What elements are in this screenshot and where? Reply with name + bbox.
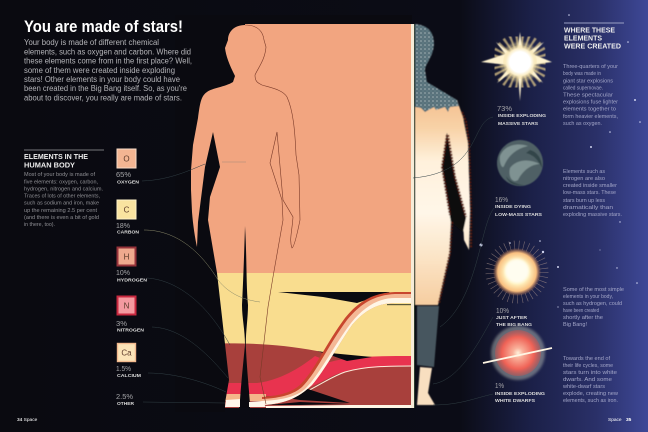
white streak [483,348,552,363]
label: 73%: INSIDE EXPLODING [498,113,546,119]
text: white dwarfs: Towards the end of [563,356,611,362]
band: lower black slivers [268,387,350,405]
element: other: OTHER [117,401,135,407]
band: carbon [190,273,412,408]
element: other: 2.5% [116,392,133,401]
text: elements description: in there, too). [24,222,55,228]
heading: where these elements were created: WERE CREATED [564,44,621,50]
mask: dark space around left silhouette [175,15,412,412]
label: 73% [497,104,546,127]
element: other [116,392,135,407]
intro text: stars! Other elements in your body could have [24,75,181,84]
text: massive stars: such as oxygen. [563,121,602,127]
band: oxygen [190,24,412,273]
element: nitrogen [116,296,145,334]
intro text: Your body is made of different chemical [24,38,159,47]
element: calcium [116,344,141,379]
text: low-mass stars: created inside smaller [563,183,617,189]
heading: elements: ELEMENTS IN THE [24,154,88,161]
element: calcium: CALCIUM [117,373,141,379]
label: 1%: INSIDE EXPLODING [495,391,545,397]
foot [417,367,435,405]
mask: gap between legs [239,226,250,408]
element: calcium: 1.5% [116,364,131,373]
text: low-mass stars: Elements such as [563,169,605,175]
text: elements description: hydrogen, nitrogen and calcium. [24,187,103,193]
planet bands [500,144,540,181]
text: big bang: Some of the most simple [563,287,624,293]
label: 73%: 73% [497,104,512,113]
text: massive stars: body was made in [563,71,601,77]
text: white dwarfs [562,356,618,404]
sankey panel: left half of body, elements by colour [190,24,412,408]
intro text: these elements come from in the first place? Well, [24,57,192,66]
text: massive stars: called supernovae. [563,86,603,92]
page number right: Space 35 [608,417,632,423]
head and shoulders dotted [415,24,459,112]
heading: where these elements were created [564,22,624,50]
star: just after the big bang [490,245,544,299]
element: hydrogen: HYDROGEN [117,278,148,284]
label: 10% [496,306,532,328]
text: low-mass stars: dramatically than [563,205,613,211]
arm gap [442,133,466,232]
page number left: 34 Space [17,417,38,423]
element: oxygen: O [123,154,130,164]
element: carbon: CARBON [117,230,140,236]
text: white dwarfs: dwarfs. And some [563,377,612,383]
text: white dwarfs: their life cycles, some [563,363,613,369]
body fill [415,100,470,305]
text: low-mass stars: stars burn up less [563,198,605,204]
text: white dwarfs: stars turn into white [563,370,617,376]
band: bundle S curve [262,292,412,405]
planet: inside dying low-mass stars [497,140,543,186]
heading: elements: HUMAN BODY [24,162,75,170]
text: white dwarfs: elements, such as iron. [563,398,618,404]
band: right thin dark line [387,304,412,305]
vertical divider strip [411,24,415,408]
text: massive stars: explosions fuse lighter [563,100,618,106]
band: base white line [266,405,412,408]
text: low-mass stars: low-mass stars. These [563,190,616,196]
element: nitrogen: N [124,302,130,310]
text: white dwarfs: explode, creating new [563,391,618,397]
intro text: some of them were created inside exploding [24,66,175,75]
text: elements description [24,172,103,228]
intro text: about to discover, you really are made of stars. [24,93,182,102]
text: big bang: have been created [563,308,599,314]
right half of body: made of stars [415,24,471,405]
text: big bang [563,287,624,328]
element: carbon [116,200,140,236]
text: massive stars: form heavier elements, [563,114,619,120]
element: calcium: Ca [121,348,132,358]
leader lines: left labels to body [142,162,260,403]
text: big bang: shortly after the [563,315,603,321]
text: big bang: such as hydrogen, could [563,301,622,307]
title: You are made of stars! [24,18,183,36]
text: massive stars: Three-quarters of your [563,64,618,70]
element: hydrogen [116,248,148,284]
body speckled edge [439,112,471,303]
text: elements description: up the remaining 2.5 per cent [24,208,98,214]
element: nitrogen: NITROGEN [117,328,145,334]
intro text: been created in the Big Bang itself. So, as you're [24,84,188,93]
feet [225,399,266,407]
band: upper black sliver [278,292,390,303]
band: nitrogen pink [190,356,412,396]
text: massive stars: elements together to [563,107,616,113]
label: 73%: MASSIVE STARS [498,121,539,127]
label: 1%: 1% [495,381,504,390]
star spikes [481,32,552,101]
heading: where these elements were created: ELEMENTS [564,36,602,42]
element: oxygen: 65% [116,170,131,179]
band: calcium peach base [190,394,266,401]
label: 16%: 16% [495,195,508,204]
outline: right side of left figure [245,25,300,404]
shin grey [417,306,439,367]
element: carbon: 18% [116,221,130,230]
intro text: elements, such as oxygen and carbon. Where did [24,47,191,56]
label: 10%: JUST AFTER [496,315,528,321]
element: carbon: C [124,206,130,214]
element: nitrogen: 3% [116,319,127,328]
text: elements description: such as sodium and iron, make [24,201,99,207]
text: massive stars [563,64,619,127]
text: big bang: Big Bang! [563,322,588,328]
label: 16%: INSIDE DYING [495,204,531,210]
intro text [24,38,192,102]
text: low-mass stars: exploding massive stars. [563,212,622,218]
text: elements description: (and there is even a bit of gold [24,215,99,221]
element: oxygen [116,149,140,186]
text: elements description: Traces of lots of other elements, [24,194,100,200]
label: 16%: LOW-MASS STARS [495,212,543,218]
panel: elements in the human body [24,150,104,228]
leader lines: right labels to body [413,117,494,405]
text: low-mass stars: nitrogen are also [563,176,605,182]
star: inside exploding massive stars [481,32,552,101]
label: 16% [495,195,543,218]
text: massive stars: giant star explosions [563,78,613,84]
text: low-mass stars [563,169,622,218]
heading: elements [24,154,88,170]
band: thin white nitrogen line [270,366,412,404]
scattered background stars [480,14,641,308]
text: massive stars: These spectacular [563,92,613,98]
element: hydrogen: H [124,252,130,262]
label: 1% [495,381,545,404]
heading: where these elements were created: WHERE THESE [564,28,615,34]
label: 10%: 10% [496,306,509,315]
text: big bang: elements in your body, [563,294,613,300]
band: hydrogen dark red [190,343,412,408]
element: hydrogen: 10% [116,268,130,277]
text: elements description: Most of your body is made of [24,172,96,178]
label: 1%: WHITE DWARFS [495,398,536,404]
band: middle black sliver [317,351,372,361]
star: inside exploding white dwarfs [483,326,552,380]
text: elements description: five elements: oxygen, carbon, [24,180,98,186]
text: white dwarfs: white-dwarf stars [562,384,605,390]
element: oxygen: OXYGEN [117,180,140,186]
label: 10%: THE BIG BANG [496,322,532,328]
